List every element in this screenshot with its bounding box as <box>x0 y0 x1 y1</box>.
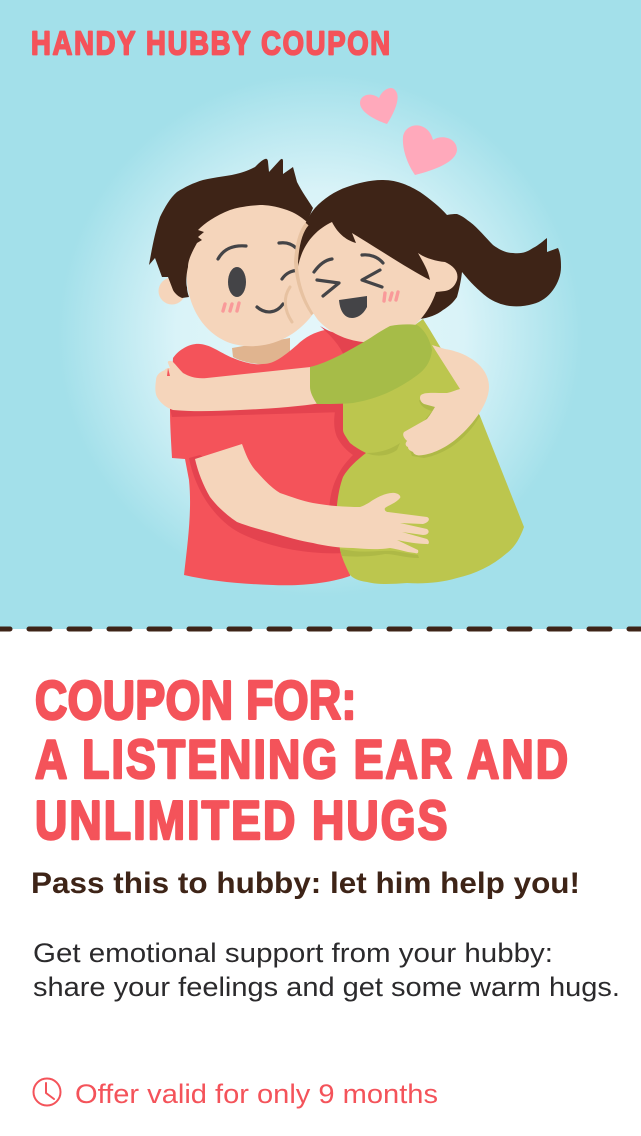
woman: dress shadows <box>340 400 480 558</box>
description text: Get emotional support from your hubby: <box>33 938 553 968</box>
illustration: hugging couple <box>149 159 561 585</box>
woman: brows, eyes and mouth <box>314 255 383 318</box>
description text <box>33 938 620 1002</box>
woman: arm around man's neck <box>155 361 322 411</box>
woman: cheek blush <box>384 292 398 301</box>
man: shirt peek at hand <box>167 368 170 376</box>
heading: coupon for a listening ear and unlimited hugs: A LISTENING EAR AND <box>35 729 568 790</box>
man: ear and head <box>149 159 320 364</box>
woman: green dress <box>337 319 524 584</box>
description text: share your feelings and get some warm hugs. <box>33 972 620 1002</box>
panel: blue illustration background <box>0 0 641 629</box>
man: tan shadow beside woman's face <box>296 224 313 314</box>
man: hair <box>149 159 313 298</box>
icon: clock <box>34 1078 60 1106</box>
man: right arm and hand <box>403 345 489 455</box>
heading: coupon for a listening ear and unlimited hugs <box>35 670 568 851</box>
panel: white coupon details background <box>0 629 641 1136</box>
offer validity note: Offer valid for only 9 months <box>75 1079 438 1109</box>
subheading: Pass this to hubby: let him help you! <box>31 867 580 900</box>
man: eye, wink, brows and smile <box>218 243 298 312</box>
man: cheek blush <box>223 303 239 311</box>
coupon tear line <box>0 626 641 632</box>
man: lower arm and hand <box>195 444 429 553</box>
icon: large heart <box>403 125 457 175</box>
heading: coupon for a listening ear and unlimited hugs: COUPON FOR: <box>35 670 356 731</box>
woman: hair and ponytail <box>297 180 561 319</box>
woman: green sleeve <box>310 324 432 404</box>
man: shirt shadows <box>170 326 368 553</box>
man: cheek line <box>285 287 292 322</box>
man: red t-shirt <box>170 330 362 585</box>
heading: coupon for a listening ear and unlimited hugs: UNLIMITED HUGS <box>35 790 447 851</box>
title: handy hubby coupon: HANDY HUBBY COUPON <box>31 25 390 62</box>
icon: small heart <box>360 88 398 124</box>
woman: face and ear <box>298 222 457 342</box>
